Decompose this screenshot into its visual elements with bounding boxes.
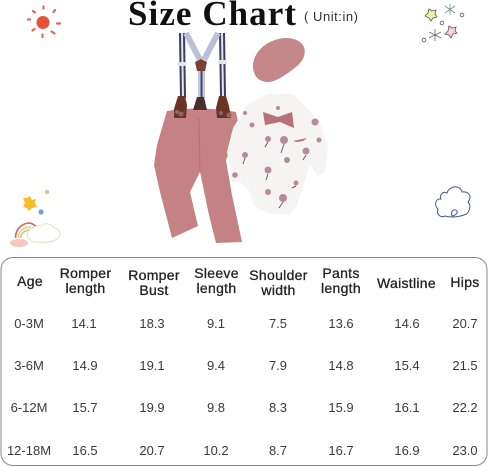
- romper: [227, 94, 328, 215]
- row: 12-18M: 12-18M: [7, 443, 51, 458]
- row: 3-6M: 14.8: [328, 358, 354, 373]
- row: 6-12M: 16.1: [394, 400, 420, 415]
- row: 6-12M: 19.9: [139, 400, 165, 415]
- table header: length: [197, 280, 236, 296]
- row: 12-18M: 10.2: [203, 443, 229, 458]
- row: 0-3M: 13.6: [328, 316, 354, 331]
- row: 0-3M: 9.1: [207, 316, 225, 331]
- row: 0-3M: 14.1: [71, 316, 97, 331]
- row: 3-6M: 21.5: [452, 358, 478, 373]
- row: 3-6M: 3-6M: [14, 358, 44, 373]
- icon: star and rainbow cloud: [10, 190, 60, 247]
- row: 12-18M: [7, 443, 478, 458]
- row: 12-18M: 16.7: [328, 443, 354, 458]
- size table: [1, 258, 487, 466]
- row: 3-6M: 15.4: [394, 358, 420, 373]
- row: 12-18M: 23.0: [452, 443, 478, 458]
- row: 6-12M: [11, 400, 478, 415]
- romper floral print: [232, 106, 322, 202]
- row: 3-6M: 7.9: [269, 358, 287, 373]
- row: 6-12M: 9.8: [207, 400, 225, 415]
- table header: Pants: [322, 265, 360, 281]
- row: 0-3M: 18.3: [139, 316, 165, 331]
- pocket square: [293, 138, 307, 142]
- icon: cloud outline: [436, 187, 470, 217]
- row: 6-12M: 6-12M: [11, 400, 47, 415]
- table header: Sleeve: [194, 265, 239, 281]
- row: 3-6M: 14.9: [72, 358, 98, 373]
- row: 6-12M: 15.9: [328, 400, 354, 415]
- table header: width: [260, 282, 296, 298]
- table header: Age: [17, 273, 43, 289]
- product photo: outfit: [154, 33, 328, 243]
- table header: length: [321, 280, 361, 296]
- hat: [253, 38, 305, 82]
- icon: sun: [28, 6, 60, 37]
- row: 12-18M: 16.5: [72, 443, 98, 458]
- table header: [17, 265, 480, 298]
- unit label: ( Unit:in): [304, 9, 358, 24]
- suspender clips: [175, 110, 232, 118]
- row: 0-3M: 0-3M: [14, 316, 44, 331]
- suspenders: [174, 33, 231, 118]
- row: 12-18M: 20.7: [139, 443, 165, 458]
- table header: Romper: [128, 267, 180, 283]
- row: 3-6M: [14, 358, 478, 373]
- row: 0-3M: 14.6: [394, 316, 420, 331]
- table header: Bust: [139, 282, 169, 298]
- row: 6-12M: 15.7: [72, 400, 98, 415]
- table header: Waistline: [377, 275, 436, 291]
- table frame: [1, 258, 487, 466]
- bow tie: [263, 112, 294, 128]
- row: 0-3M: 20.7: [452, 316, 478, 331]
- table header: Shoulder: [249, 267, 308, 283]
- row: 0-3M: 7.5: [269, 316, 287, 331]
- icon: stars and snowflakes: [422, 4, 464, 42]
- row: 0-3M: [14, 316, 478, 331]
- row: 6-12M: 22.2: [452, 400, 478, 415]
- pants: [154, 108, 242, 243]
- table header: Romper: [60, 265, 111, 281]
- row: 12-18M: 8.7: [269, 443, 287, 458]
- table header: length: [66, 280, 105, 296]
- table header: Hips: [450, 274, 480, 290]
- row: 6-12M: 8.3: [269, 400, 287, 415]
- row: 3-6M: 9.4: [207, 358, 225, 373]
- row: 3-6M: 19.1: [139, 358, 165, 373]
- row: 12-18M: 16.9: [394, 443, 420, 458]
